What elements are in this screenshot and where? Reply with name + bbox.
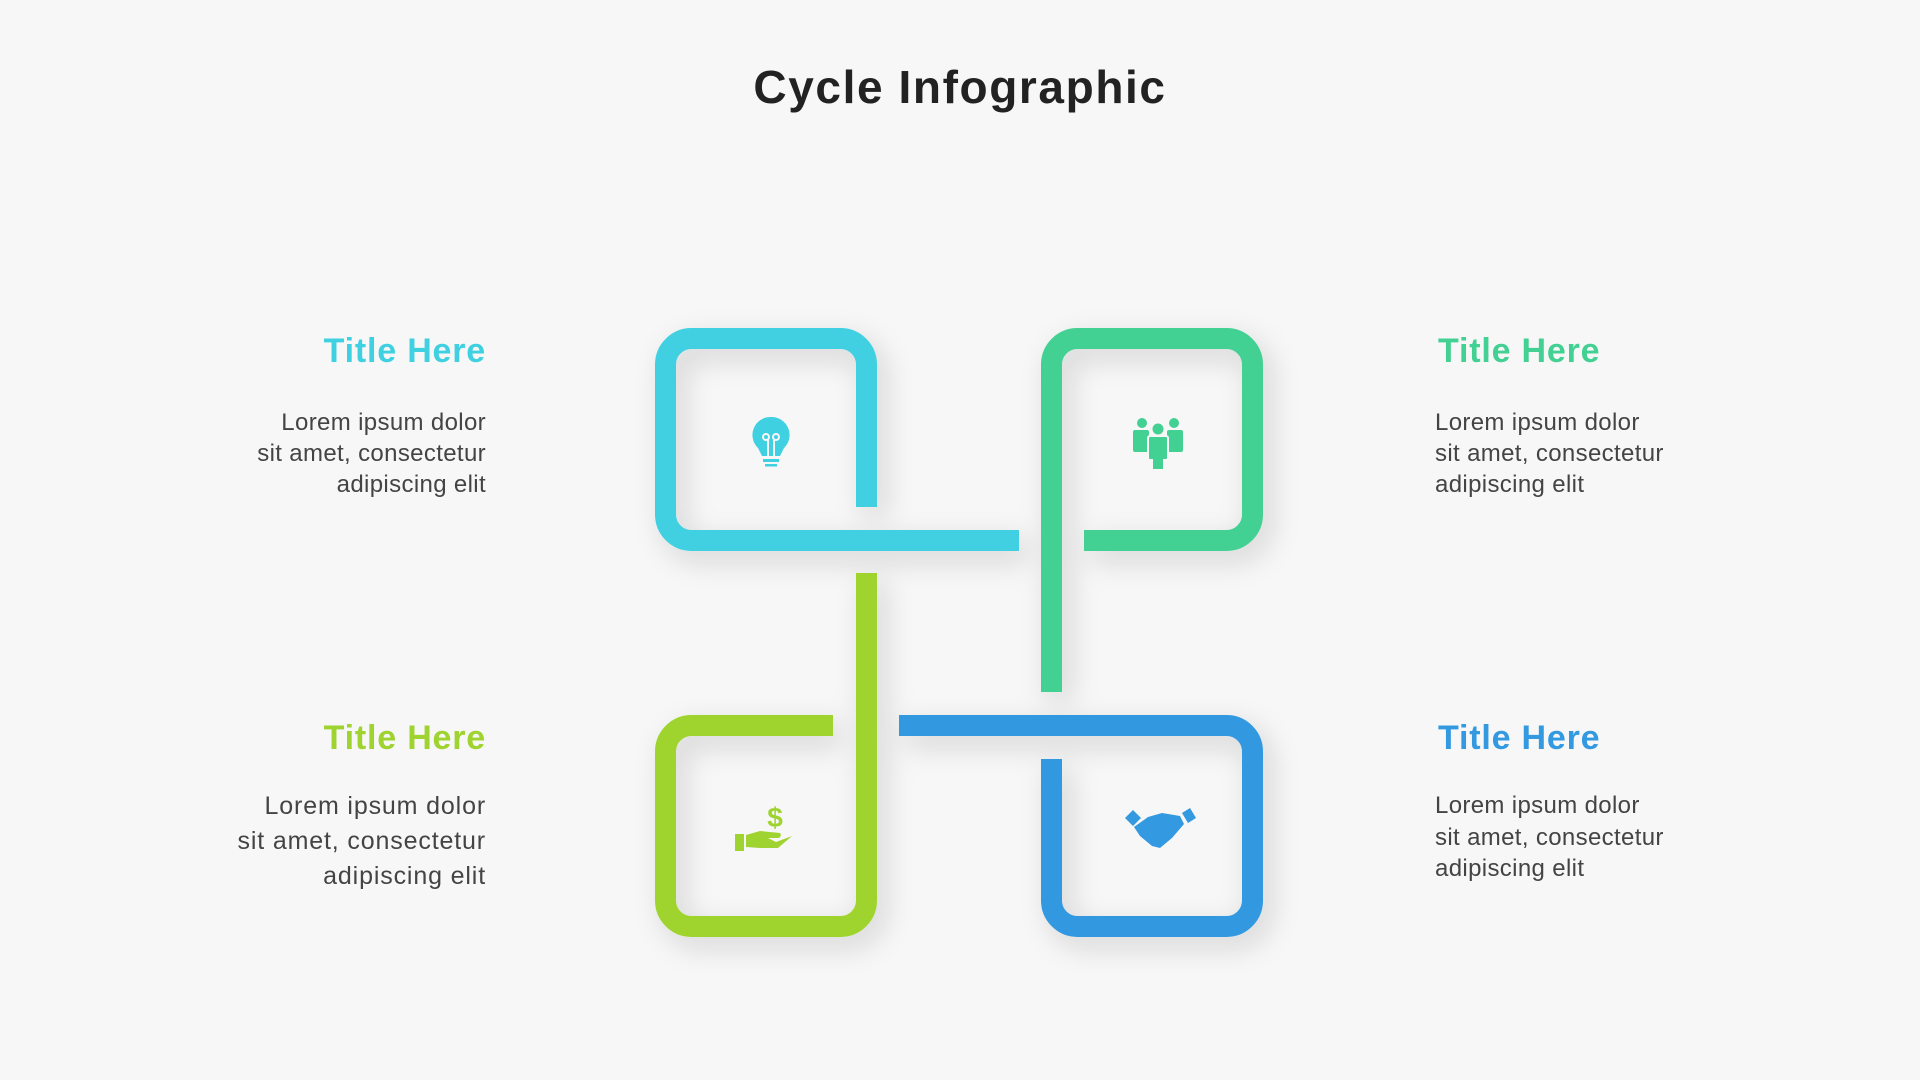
title: Cycle Infographic [753,61,1167,113]
body: top-right [1435,409,1664,498]
icon: light bulb [752,417,790,466]
body: bottom-left: sit amet, consectetur [237,827,486,855]
body: bottom-right: sit amet, consectetur [1435,824,1664,850]
loop: blue [899,726,1252,926]
body: bottom-right [1435,792,1664,882]
body: top-right: Lorem ipsum dolor [1435,409,1640,436]
heading: bottom-left: Title Here [324,719,486,757]
body: top-right: adipiscing elit [1435,471,1584,498]
body: bottom-left: adipiscing elit [323,862,486,890]
body: top-right: sit amet, consectetur [1435,440,1664,467]
body: bottom-right: Lorem ipsum dolor [1435,792,1640,819]
loop: green [1052,338,1252,692]
icon: handshake [1125,808,1196,848]
text block: bottom-left [237,719,486,890]
icon: people [1133,418,1183,469]
body: top-left: adipiscing elit [337,471,486,498]
heading: top-left: Title Here [324,332,486,370]
loop: cyan [666,338,1019,540]
heading: bottom-right: Title Here [1438,719,1600,757]
body: bottom-right: adipiscing elit [1435,855,1584,882]
icon: money hand: $ [767,802,783,833]
text block: top-right [1435,332,1664,498]
icon: money hand [735,802,792,851]
heading: top-right: Title Here [1438,332,1600,370]
text block: bottom-right [1435,719,1664,882]
body: bottom-left: Lorem ipsum dolor [265,792,486,820]
body: top-left: sit amet, consectetur [257,440,486,467]
loop: lime [666,573,866,926]
text block: top-left [257,332,486,498]
body: top-left: Lorem ipsum dolor [281,409,486,436]
body: bottom-left [237,792,486,890]
body: top-left [257,409,486,498]
